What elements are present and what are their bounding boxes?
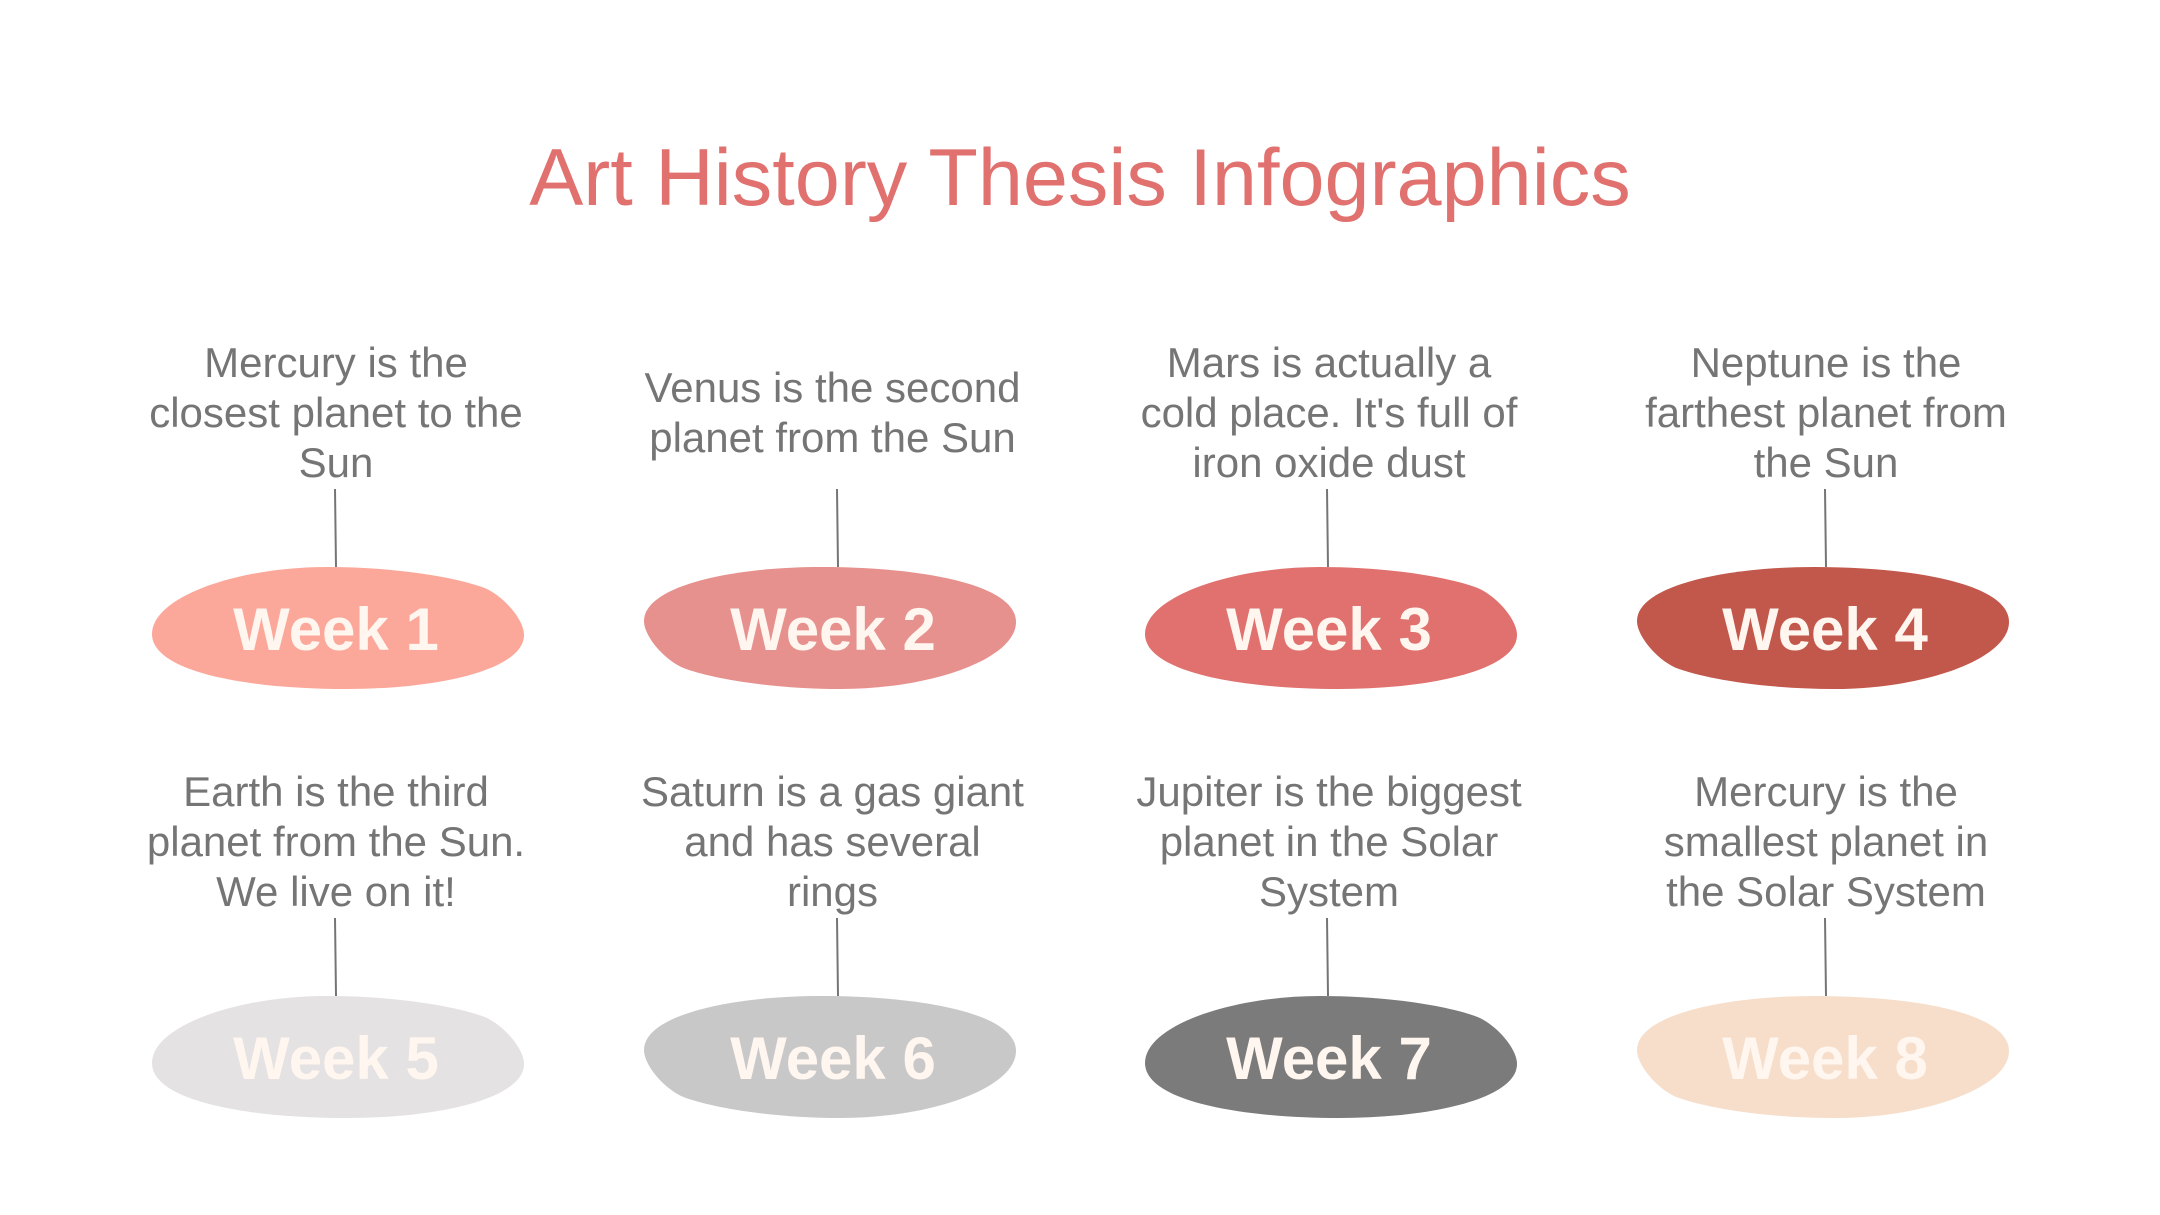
connector: week 4 (1825, 489, 1826, 567)
text: week 3 description: cold place. It's full of (1141, 389, 1518, 436)
blob: week 3 (1145, 567, 1517, 689)
blob: week 2 (644, 567, 1016, 689)
blob: week 8 (1637, 996, 2009, 1118)
panel: week 5 (147, 768, 525, 1118)
blob: week 6 (644, 996, 1016, 1118)
connector: week 3 (1327, 489, 1328, 567)
label: week 8: Week 8 (1722, 1025, 1928, 1092)
text: week 2 description: planet from the Sun (649, 414, 1016, 461)
blob: week 1 (152, 567, 524, 689)
connector: week 5 (335, 918, 336, 996)
text: week 4 description: Neptune is the (1691, 339, 1961, 386)
text: week 7 description: System (1259, 868, 1399, 915)
text: week 6 description: and has several (684, 818, 981, 865)
blob: week 7 (1145, 996, 1517, 1118)
text: week 1 description: Sun (299, 439, 373, 486)
text: week 5 description: We live on it! (216, 868, 456, 915)
label: week 6: Week 6 (730, 1025, 936, 1092)
connector: week 6 (837, 918, 838, 996)
label: week 1: Week 1 (233, 596, 439, 663)
text: week 4 description: farthest planet from (1645, 389, 2007, 436)
text: week 4 description: the Sun (1754, 439, 1898, 486)
text: week 8 description: smallest planet in (1664, 818, 1988, 865)
panel: week 2 (644, 364, 1020, 689)
text: week 5 description: planet from the Sun. (147, 818, 525, 865)
connector: week 2 (837, 489, 838, 567)
title: Art History Thesis Infographics (529, 133, 1631, 223)
panel: week 8 (1637, 768, 2009, 1118)
panel: week 3 (1141, 339, 1518, 689)
label: week 4: Week 4 (1722, 596, 1928, 663)
connector: week 8 (1825, 918, 1826, 996)
label: week 5: Week 5 (233, 1025, 439, 1092)
connector: week 1 (335, 489, 336, 567)
text: week 3 description: Mars is actually a (1167, 339, 1492, 386)
text: week 5 description: Earth is the third (183, 768, 489, 815)
connector: week 7 (1327, 918, 1328, 996)
panel: week 6 (641, 768, 1024, 1118)
text: week 2 description: Venus is the second (645, 364, 1020, 411)
panel: week 1 (149, 339, 524, 689)
text: week 8 description: the Solar System (1666, 868, 1986, 915)
label: week 2: Week 2 (730, 596, 936, 663)
text: week 3 description: iron oxide dust (1192, 439, 1466, 486)
text: week 7 description: Jupiter is the biggest (1136, 768, 1522, 815)
text: week 1 description: closest planet to the (149, 389, 523, 436)
label: week 7: Week 7 (1226, 1025, 1432, 1092)
text: week 6 description: rings (787, 868, 878, 915)
panel: week 7 (1136, 768, 1522, 1118)
text: week 1 description: Mercury is the (204, 339, 468, 386)
text: week 7 description: planet in the Solar (1160, 818, 1498, 865)
text: week 6 description: Saturn is a gas giant (641, 768, 1024, 815)
panel: week 4 (1637, 339, 2009, 689)
text: week 8 description: Mercury is the (1694, 768, 1958, 815)
blob: week 4 (1637, 567, 2009, 689)
blob: week 5 (152, 996, 524, 1118)
label: week 3: Week 3 (1226, 596, 1432, 663)
